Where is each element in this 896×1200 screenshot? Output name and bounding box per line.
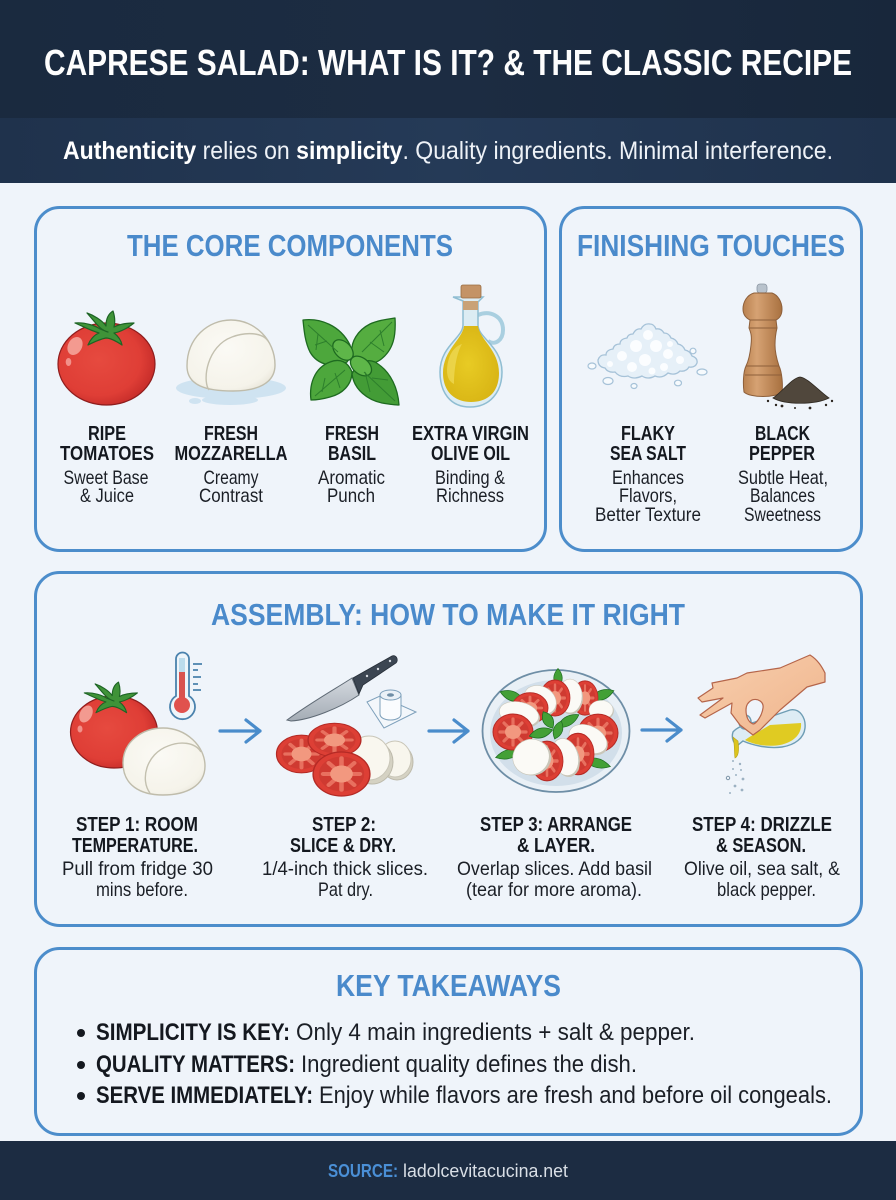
icon: basil (303, 318, 399, 405)
label: extra virgin olive oil: Binding & (435, 467, 505, 489)
label: ripe tomatoes: Sweet Base (64, 467, 148, 489)
arrow (220, 720, 260, 742)
takeaway: quality (77, 1051, 637, 1078)
text: step 4: black pepper. (717, 879, 816, 901)
label: fresh basil: FRESH (325, 423, 379, 445)
footer source (0, 1141, 896, 1200)
label: flaky sea salt: Flavors, (619, 485, 677, 507)
takeaway: simplicity (77, 1019, 695, 1046)
panel: core components (36, 208, 546, 550)
icon: pepper mill and ground pepper (743, 284, 833, 409)
text: step 1 (62, 814, 213, 901)
subtitle band (0, 118, 896, 183)
label: black pepper: BLACK (755, 423, 810, 445)
label: fresh basil: Punch (327, 485, 375, 507)
label: flaky sea salt: Better Texture (595, 504, 701, 526)
icon: olive oil bottle (440, 285, 503, 407)
panel: assembly (36, 572, 862, 926)
text: step 3: Overlap slices. Add basil (457, 858, 652, 880)
text: step 4: STEP 4: DRIZZLE (692, 814, 832, 836)
takeaway: quality: QUALITY MATTERS: (96, 1051, 295, 1078)
text: step 2: STEP 2: (312, 814, 376, 836)
text: step 4 (684, 814, 840, 901)
takeaway: serve (77, 1082, 832, 1109)
text: step 1: mins before. (96, 879, 188, 901)
footer source: SOURCE: (328, 1160, 398, 1181)
text: step 1: Pull from fridge 30 (62, 858, 213, 880)
label: flaky sea salt (595, 423, 701, 526)
label: extra virgin olive oil: EXTRA VIRGIN (412, 423, 529, 445)
label: flaky sea salt: Enhances (612, 467, 684, 489)
panel: finishing touches (560, 208, 862, 550)
heading: finishing touches: FINISHING TOUCHES (577, 228, 845, 263)
icon: mozzarella (176, 320, 286, 405)
label: fresh mozzarella: MOZZARELLA (174, 443, 288, 465)
label: fresh mozzarella (174, 423, 288, 507)
label: fresh mozzarella: Creamy (204, 467, 259, 489)
label: black pepper: PEPPER (749, 443, 815, 465)
takeaway: serve: Enjoy while flavors are fresh and before oil congeals. (319, 1082, 832, 1109)
takeaway: simplicity: Only 4 main ingredients + salt & pepper. (296, 1019, 695, 1046)
label: black pepper: Subtle Heat, (738, 467, 828, 489)
takeaway: serve: SERVE IMMEDIATELY: (96, 1082, 313, 1109)
icon: step 2 knife, paper towel, slices (276, 656, 416, 796)
heading: key takeaways: KEY TAKEAWAYS (336, 968, 561, 1003)
label: fresh basil: Aromatic (318, 467, 385, 489)
text: step 2: 1/4-inch thick slices. (262, 858, 428, 880)
text: step 3 (457, 814, 652, 901)
heading: core components: THE CORE COMPONENTS (127, 228, 453, 263)
icon: step 1 tomato, mozzarella, thermometer (70, 653, 205, 795)
text: step 3: (tear for more aroma). (466, 879, 642, 901)
text: step 4: & SEASON. (716, 835, 806, 857)
heading: assembly: ASSEMBLY: HOW TO MAKE IT RIGHT (211, 597, 685, 632)
takeaway: quality: Ingredient quality defines the dish. (301, 1051, 637, 1078)
text: step 1: TEMPERATURE. (72, 835, 198, 857)
label: fresh basil: BASIL (328, 443, 376, 465)
label: flaky sea salt: SEA SALT (610, 443, 686, 465)
arrow (642, 719, 681, 741)
label: black pepper: Sweetness (744, 504, 821, 526)
arrow (429, 720, 468, 742)
label: ripe tomatoes: TOMATOES (60, 443, 154, 465)
label: fresh basil (318, 423, 385, 507)
icon: step 3 plate of caprese (482, 668, 630, 792)
text: step 4: Olive oil, sea salt, & (684, 858, 840, 880)
icon: step 4 hand pouring oil (698, 655, 825, 794)
label: fresh mozzarella: Contrast (199, 485, 263, 507)
footer source: ladolcevitacucina.net (403, 1160, 568, 1181)
icon: sea salt pile (588, 324, 707, 388)
text: step 2: Pat dry. (318, 879, 373, 901)
text: step 1: STEP 1: ROOM (76, 814, 198, 836)
label: ripe tomatoes (60, 423, 154, 507)
subtitle band: Authenticity relies on simplicity. Quality ingredients. Minimal interference. (63, 137, 833, 165)
label: black pepper: Balances (750, 485, 815, 507)
label: extra virgin olive oil: Richness (436, 485, 504, 507)
label: ripe tomatoes: & Juice (80, 485, 134, 507)
label: black pepper (738, 423, 828, 526)
text: step 3: STEP 3: ARRANGE (480, 814, 632, 836)
label: flaky sea salt: FLAKY (621, 423, 676, 445)
icon: tomato (58, 311, 155, 405)
takeaway: simplicity: SIMPLICITY IS KEY: (96, 1019, 290, 1046)
text: step 2 (262, 814, 428, 901)
label: fresh mozzarella: FRESH (204, 423, 258, 445)
label: ripe tomatoes: RIPE (88, 423, 126, 445)
title banner (0, 0, 896, 118)
text: step 3: & LAYER. (517, 835, 595, 857)
label: extra virgin olive oil: OLIVE OIL (431, 443, 510, 465)
label: extra virgin olive oil (412, 423, 529, 507)
panel: key takeaways (36, 948, 862, 1134)
text: step 2: SLICE & DRY. (290, 835, 396, 857)
